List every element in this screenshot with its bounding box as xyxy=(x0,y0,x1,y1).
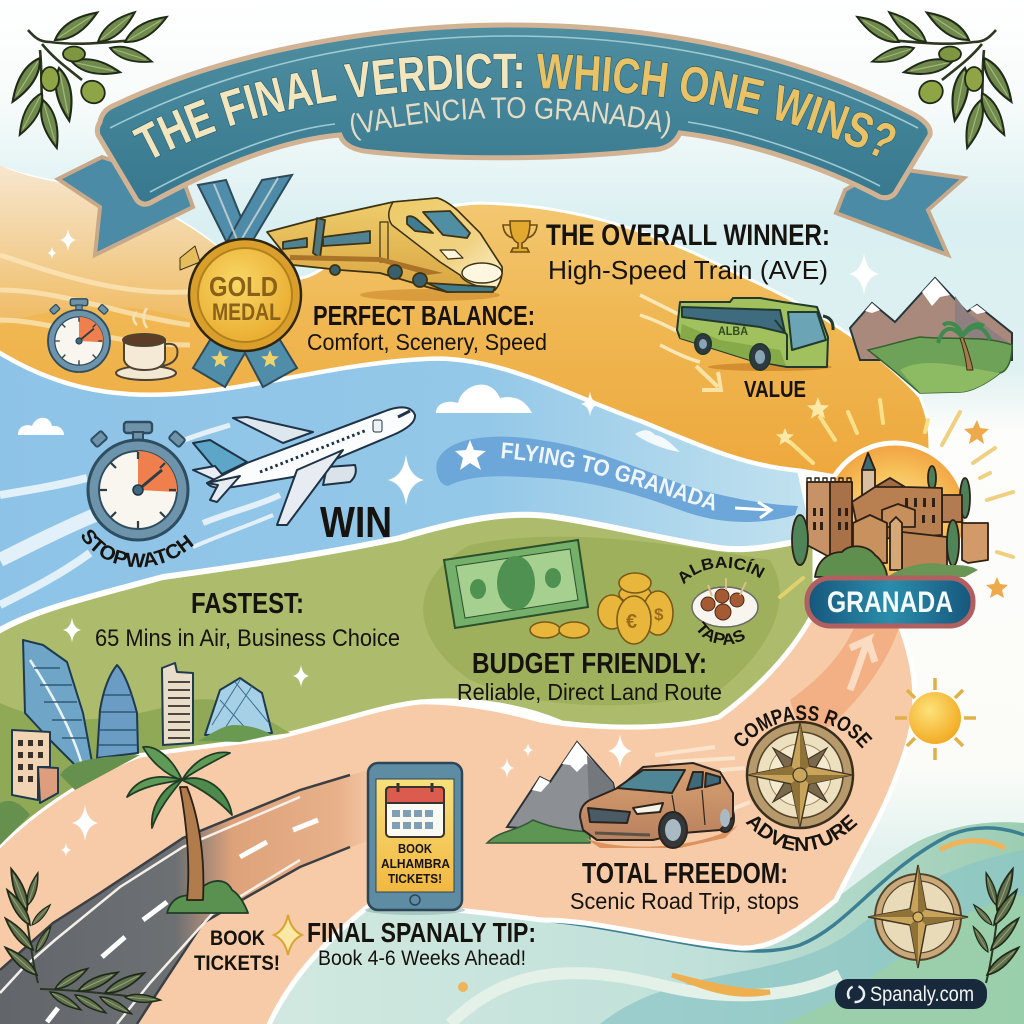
Valencia skyline xyxy=(0,640,272,845)
left ribbon tail xyxy=(58,157,193,255)
title banner xyxy=(54,22,968,258)
phone with tickets xyxy=(365,763,465,915)
streaks behind the car xyxy=(655,747,750,810)
medal ribbon straps xyxy=(198,175,292,245)
label: book: BOOK xyxy=(210,927,265,950)
olive branch bottom left horizontal xyxy=(40,965,161,1017)
Granada label pill xyxy=(807,578,973,626)
icon: coffee cup xyxy=(116,308,178,380)
label: tickets: TICKETS! xyxy=(194,952,280,975)
icon: banknote xyxy=(444,540,588,628)
text: book ahead: Book 4-6 Weeks Ahead! xyxy=(318,947,526,970)
badge: Spanaly.com: Spanaly.com xyxy=(870,983,974,1006)
arrow: value xyxy=(696,366,721,390)
phone text: BOOK xyxy=(398,841,433,856)
medal label line two: MEDAL xyxy=(212,299,281,326)
palm tree xyxy=(127,747,248,913)
heading: total freedom: TOTAL FREEDOM: xyxy=(582,858,788,890)
icon: sun xyxy=(895,678,976,760)
text: comfort scenery speed: Comfort, Scenery, Speed xyxy=(307,329,547,355)
label: tapas: TAPAS xyxy=(698,621,745,645)
label: stopwatch: STOPWATCH xyxy=(82,530,194,568)
badge: Spanaly.com xyxy=(835,979,987,1009)
phone text line two: ALHAMBRA xyxy=(381,856,451,871)
heading: value: VALUE xyxy=(744,376,806,402)
gold medal xyxy=(189,239,301,387)
icon: coins xyxy=(530,573,673,644)
icon: airplane xyxy=(193,407,415,525)
panel: flight blue band xyxy=(0,346,815,636)
Granada label pill: GRANADA xyxy=(827,586,953,619)
panel: bottom mint waves xyxy=(250,822,1024,1024)
sparkles in blue band xyxy=(48,229,599,687)
olive branch top left xyxy=(7,7,170,150)
compass rose xyxy=(746,721,854,829)
small compass bottom right xyxy=(868,865,968,968)
castle xyxy=(792,453,988,577)
icon: trophy xyxy=(503,221,537,252)
medal ribbon tails xyxy=(193,340,297,387)
banner inner line xyxy=(110,36,918,192)
icon: coins: € xyxy=(626,611,637,633)
phone text line three: TICKETS! xyxy=(388,871,442,886)
icon: gold sparkle by tip xyxy=(274,915,302,955)
olive branch bottom right xyxy=(971,867,1022,983)
banner body xyxy=(97,25,930,204)
label: compass rose: COMPASS ROSE xyxy=(734,705,872,748)
sparkle: right of winner text xyxy=(849,253,879,295)
subtitle text: (VALENCIA TO GRANADA) xyxy=(351,97,670,141)
icon: large stopwatch xyxy=(88,422,188,540)
contrails xyxy=(0,425,280,605)
mountains and palm xyxy=(850,278,1012,393)
text: high-speed train: High-Speed Train (AVE) xyxy=(548,255,828,285)
heading: budget friendly: BUDGET FRIENDLY: xyxy=(472,648,707,680)
olive branch bottom left upright xyxy=(2,867,53,983)
medal label: GOLD xyxy=(209,271,278,302)
icon: tan car xyxy=(580,763,738,848)
icon: ALSA green bus: ALBA xyxy=(718,324,748,338)
icon: tapas plate xyxy=(692,578,758,627)
heading: perfect balance: PERFECT BALANCE: xyxy=(313,300,535,331)
ribbon: flying to Granada xyxy=(436,436,798,522)
heading: fastest: FASTEST: xyxy=(191,588,304,620)
sparkles on road band xyxy=(61,734,632,857)
road xyxy=(0,768,375,1024)
olive branch top right xyxy=(854,7,1017,150)
heading: overall winner: THE OVERALL WINNER: xyxy=(546,219,830,252)
arrow: road up to Granada xyxy=(790,625,900,745)
calendar icon xyxy=(386,783,444,837)
Granada Alhambra emblem xyxy=(776,397,1013,598)
label: adventure: ADVENTURE xyxy=(746,814,858,851)
icon: ALSA green bus xyxy=(677,298,833,371)
panel: road trip peach band xyxy=(0,610,915,1024)
heading: final tip: FINAL SPANALY TIP: xyxy=(307,917,536,948)
heading: win: WIN xyxy=(320,498,392,547)
label: Albaicin: ALBAICÍN xyxy=(679,556,765,584)
clouds xyxy=(18,385,680,452)
gold high-speed train xyxy=(180,198,502,301)
text: reliable route: Reliable, Direct Land Route xyxy=(457,679,722,705)
sun rays xyxy=(780,400,1013,597)
ribbon: flying to Granada: FLYING TO GRANADA xyxy=(502,442,714,511)
icon: small stopwatch xyxy=(48,299,110,372)
text: 65 mins: 65 Mins in Air, Business Choice xyxy=(95,625,400,652)
icon: coins: $ xyxy=(654,605,664,624)
title text: THE FINAL VERDICT: WHICH ONE WINS? xyxy=(131,52,896,158)
panel: budget green band xyxy=(0,515,815,855)
right ribbon tail xyxy=(836,167,964,255)
text: scenic road trip: Scenic Road Trip, stops xyxy=(570,888,799,914)
mountain by the car xyxy=(487,742,625,843)
panel: winner gold band xyxy=(0,163,930,480)
